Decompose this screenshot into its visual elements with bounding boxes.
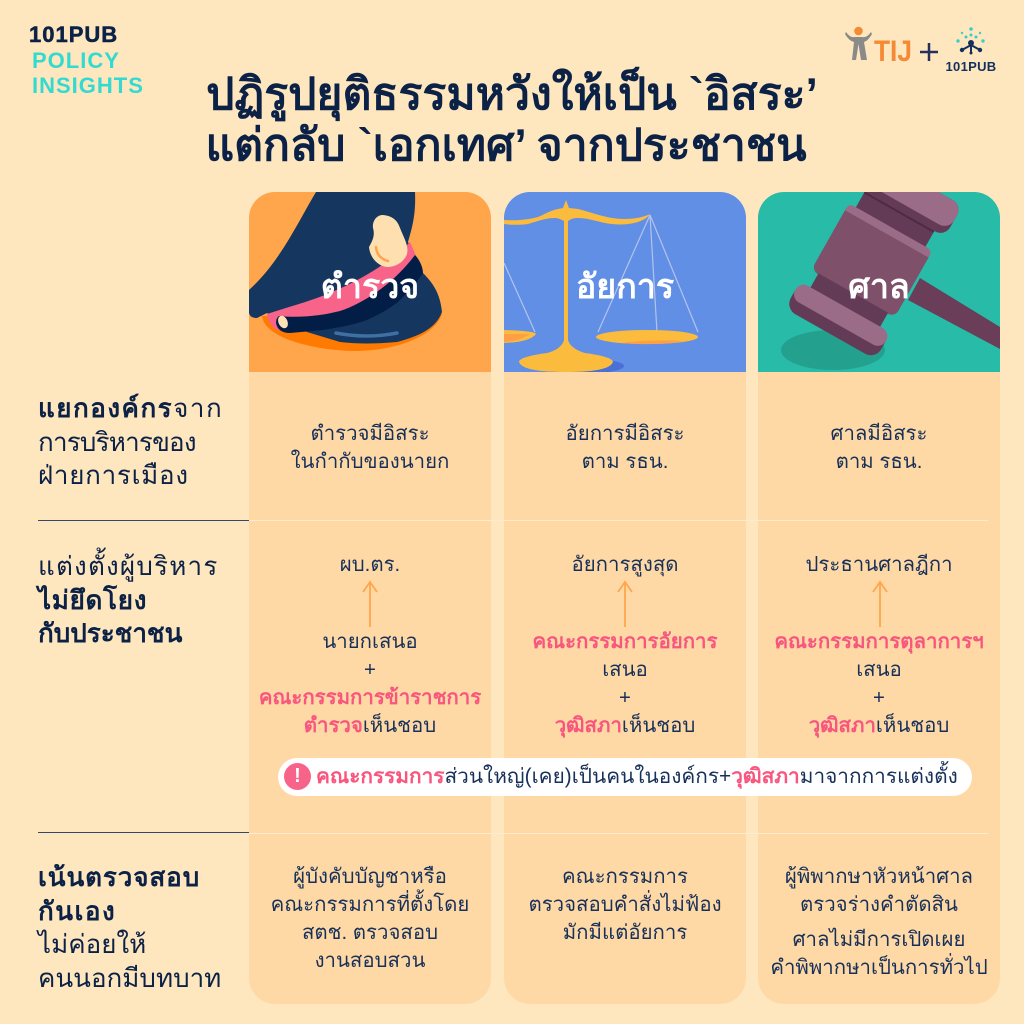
row label 3 [36, 862, 221, 993]
heading: court: ศาล [848, 268, 910, 306]
logo: TIJ + 101PUB: 101PUB [946, 59, 996, 74]
logo: 101PUB Policy Insights [29, 22, 144, 98]
court row 1: ตาม รธน. [836, 451, 922, 473]
row label 2: แต่งตั้งผู้บริหาร [38, 551, 219, 581]
callout: คณะกรรมการส่วนใหญ่(เคย)เป็นคนในองค์กร+วุฒิสภามาจากการแต่งตั้ง [316, 765, 958, 788]
police row 3: คณะกรรมการที่ตั้งโดย [271, 894, 469, 916]
court row 1 [831, 422, 927, 473]
icon: exclamation [284, 763, 311, 790]
illustration: scales [504, 192, 746, 372]
logo: 101PUB Policy Insights: POLICY [32, 48, 120, 73]
prosecutor row 1 [566, 422, 684, 473]
police row 3: ผู้บังคับบัญชาหรือ [293, 866, 447, 888]
arrow: prosecutor [617, 580, 633, 627]
arrow: court [872, 580, 888, 627]
title: ปฏิรูปยุติธรรมหวังให้เป็น `อิสระ’ [206, 70, 818, 119]
prosecutor row 3 [528, 866, 722, 944]
court row 3: คำพิพากษาเป็นการทั่วไป [770, 957, 988, 979]
heading: police: ตำรวจ [321, 268, 419, 306]
logo: 101PUB Policy Insights: INSIGHTS [32, 73, 144, 98]
police row 2 text: + [364, 659, 376, 681]
row label 1: แยกองค์กรจาก [38, 393, 223, 423]
row label 2: ไม่ยึดโยง [38, 585, 147, 615]
prosecutor row 2 text: คณะกรรมการอัยการ [533, 631, 717, 653]
police row 3: สตช. ตรวจสอบ [302, 922, 438, 944]
row label 1 [38, 393, 223, 490]
prosecutor row 1: อัยการมีอิสระ [566, 423, 684, 445]
prosecutor row 3: คณะกรรมการ [562, 866, 688, 888]
police row 2 top: ผบ.ตร. [340, 554, 400, 576]
logo: 101PUB Policy Insights: 101PUB [29, 22, 118, 47]
police row 1: ตำรวจมีอิสระ [310, 423, 430, 445]
prosecutor row 2 text: วุฒิสภาเห็นชอบ [555, 715, 695, 737]
row label 1: ฝ่ายการเมือง [38, 460, 189, 490]
icon: exclamation: ! [294, 765, 301, 787]
police row 2 text [259, 631, 482, 737]
police row 3 [271, 866, 469, 972]
row label 2 [36, 548, 219, 648]
police row 1: ในกำกับของนายก [291, 451, 449, 473]
title: แต่กลับ `เอกเทศ’ จากประชาชน [205, 121, 807, 170]
row label 3: เน้นตรวจสอบ [38, 862, 200, 892]
court row 3: ผู้พิพากษาหัวหน้าศาล [785, 866, 973, 888]
police row 1 [291, 422, 449, 473]
row label 3: ไม่ค่อยให้ [38, 929, 146, 959]
prosecutor row 2 text: เสนอ [602, 659, 648, 681]
arrow: police [362, 580, 378, 627]
court row 2 text: + [873, 687, 885, 709]
logo: TIJ + 101PUB [845, 26, 996, 74]
illustration: gavel [758, 192, 1000, 372]
court row 2 text: คณะกรรมการตุลาการฯ [774, 631, 984, 653]
prosecutor row 1: ตาม รธน. [582, 451, 668, 473]
prosecutor row 2 text: + [619, 687, 631, 709]
court row 3 [770, 866, 988, 979]
police row 2 text: ตำรวจเห็นชอบ [304, 715, 436, 737]
callout [278, 758, 972, 796]
heading: prosecutor: อัยการ [576, 268, 674, 306]
court row 2 text: วุฒิสภาเห็นชอบ [809, 715, 949, 737]
police row 2 text: คณะกรรมการข้าราชการ [259, 687, 481, 709]
row label 1: การบริหารของ [38, 427, 196, 457]
column: court background [758, 192, 1000, 1004]
prosecutor row 2 top: อัยการสูงสุด [571, 554, 679, 576]
prosecutor row 3: ตรวจสอบคำสั่งไม่ฟ้อง [528, 894, 722, 916]
column: prosecutor background [504, 192, 746, 1004]
court row 1: ศาลมีอิสระ [831, 423, 927, 445]
illustration: police cap [249, 192, 491, 372]
police row 3: งานสอบสวน [315, 950, 425, 972]
column: police background [249, 192, 491, 1004]
court row 2 text: เสนอ [856, 659, 902, 681]
court row 2 text [774, 631, 984, 738]
prosecutor row 3: มักมีแต่อัยการ [563, 922, 687, 944]
police row 2 text: นายกเสนอ [322, 631, 418, 653]
prosecutor row 2 text [533, 631, 718, 738]
row label 2: กับประชาชน [38, 618, 182, 648]
title [205, 66, 818, 170]
logo: TIJ + 101PUB: TIJ [874, 35, 912, 68]
row label 3: กันเอง [38, 896, 116, 926]
row label 3: คนนอกมีบทบาท [38, 963, 221, 993]
court row 3: ตรวจร่างคำตัดสิน ศาลไม่มีการเปิดเผย [793, 894, 965, 951]
court row 2 top: ประธานศาลฎีกา [805, 554, 953, 576]
